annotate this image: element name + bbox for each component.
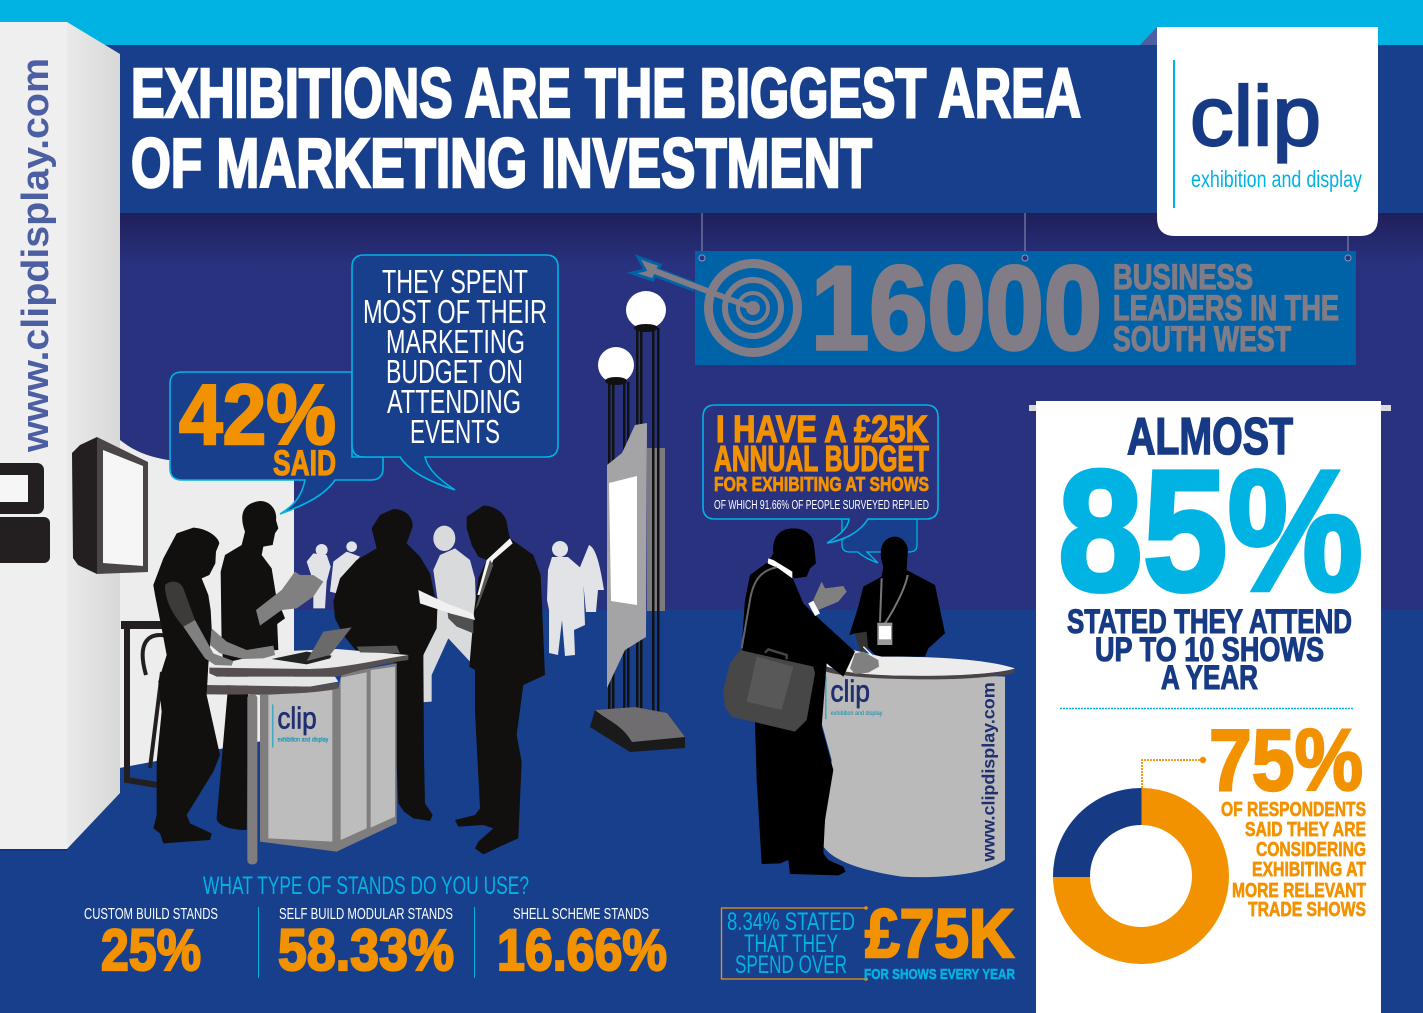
background visitors (307, 526, 476, 702)
callout: 8.34% stated 75K: SPEND OVER (735, 951, 847, 979)
person: woman at counter (153, 528, 275, 843)
75% stat with caption: SAID THEY ARE (1245, 818, 1366, 841)
logo card: clip (1190, 69, 1321, 163)
counter website address: www.clipdisplay.com (978, 682, 998, 863)
speech bubble: 25K budget: ANNUAL BUDGET (714, 438, 929, 479)
speech bubble: 25K budget: I HAVE A £25K (716, 409, 928, 451)
speech bubble: spent most of budget: THEY SPENT (382, 263, 528, 300)
stand type: shell scheme (474, 906, 667, 983)
white hanging banner: 85% attend (1029, 401, 1391, 1013)
icon: wall monitor left (0, 463, 50, 563)
icon: target with arrow (632, 257, 798, 352)
round reception counter with logo: clip (830, 675, 870, 709)
donut chart 75% (1053, 757, 1229, 964)
75% stat with caption: EXHIBITING AT (1252, 858, 1366, 881)
stand type: self build modular: SELF BUILD MODULAR STANDS (279, 906, 453, 923)
75% stat with caption (1209, 712, 1366, 921)
stand type: self build modular (258, 906, 454, 983)
speech bubble: spent most of budget (352, 255, 558, 490)
logo card: exhibition and display (1191, 166, 1362, 192)
stat caption (1113, 258, 1339, 359)
stand type: shell scheme: SHELL SCHEME STANDS (513, 906, 649, 923)
75% stat with caption: TRADE SHOWS (1248, 898, 1366, 921)
person: man in suit with paper (418, 506, 545, 854)
white hanging banner: 85% attend: 85% (1058, 435, 1363, 627)
speech bubble: 42% said: 42% (179, 368, 336, 463)
white hanging banner: 85% attend: A YEAR (1161, 659, 1258, 697)
stand type: self build modular: 58.33% (278, 918, 454, 983)
stand type: shell scheme: 16.66% (497, 918, 667, 983)
stat caption: BUSINESS (1113, 258, 1253, 297)
stat caption: LEADERS IN THE (1113, 289, 1339, 328)
callout: 8.34% stated 75K: THAT THEY (744, 930, 838, 958)
person: man with glasses (333, 509, 437, 821)
speech bubble: spent most of budget: EVENTS (410, 413, 500, 450)
speech bubble: 25K budget: FOR EXHIBITING AT SHOWS (714, 474, 929, 496)
person: man gesturing (217, 501, 323, 830)
75% stat with caption: CONSIDERING (1256, 838, 1366, 861)
callout: 8.34% stated 75K: £75K (865, 895, 1014, 972)
background visitors right (547, 541, 604, 656)
person: receptionist with lanyard (849, 537, 945, 657)
speech bubble: spent most of budget: MOST OF THEIR (363, 293, 547, 330)
speech bubble: spent most of budget: MARKETING (386, 323, 525, 360)
person: businessman with briefcase (723, 528, 879, 875)
booth wall and side panel (0, 22, 294, 850)
icon: wall monitor (72, 437, 148, 574)
lamp tower display (590, 291, 685, 752)
speech bubble: spent most of budget: ATTENDING (387, 383, 521, 420)
round reception counter with logo (817, 647, 1015, 877)
75% stat with caption: MORE RELEVANT (1232, 879, 1366, 902)
exhibition counter with logo: clip (277, 701, 317, 735)
speech bubble: 25K budget: OF WHICH 91.66% OF PEOPLE SURVEYED REPLIED (714, 497, 929, 512)
icon: laptop (272, 627, 352, 664)
exhibition counter with logo: exhibition and display (278, 737, 329, 744)
background: floor (0, 610, 1423, 1013)
stool and high shelf (121, 625, 168, 785)
exhibition counter with logo (207, 627, 408, 864)
speech bubble: 25K budget (703, 405, 938, 543)
round reception counter with logo: exhibition and display (831, 711, 882, 717)
callout: 8.34% stated 75K: 8.34% STATED (727, 908, 855, 936)
stat number: 16000 (811, 242, 1102, 375)
small reply speech bubble (842, 519, 917, 563)
stand type: custom build: CUSTOM BUILD STANDS (84, 906, 218, 923)
white hanging banner: 85% attend: ALMOST (1127, 408, 1293, 466)
speech bubble: 42% said: SAID (273, 444, 336, 483)
logo card (1140, 27, 1378, 236)
speech bubble: 42% said (170, 368, 383, 514)
stands survey heading: WHAT TYPE OF STANDS DO YOU USE? (203, 872, 529, 900)
white hanging banner: 85% attend: UP TO 10 SHOWS (1095, 631, 1324, 669)
background: exhibition hall wall (0, 213, 1423, 610)
75% stat with caption: 75% (1209, 712, 1363, 809)
stand type: custom build: 25% (101, 918, 201, 983)
title (131, 54, 1081, 202)
callout: 8.34% stated 75K: FOR SHOWS EVERY YEAR (864, 966, 1015, 983)
speech bubble: spent most of budget: BUDGET ON (386, 353, 523, 390)
vertical website address: www.clipdisplay.com (15, 58, 57, 453)
hanging banner: 16000 business leaders (695, 242, 1356, 375)
title: EXHIBITIONS ARE THE BIGGEST AREA (131, 54, 1081, 132)
background: header band (0, 45, 1423, 213)
75% stat with caption: OF RESPONDENTS (1221, 798, 1366, 821)
background: top cyan band (0, 0, 1423, 45)
callout: 8.34% stated 75K (722, 895, 1015, 983)
icon: shoulder briefcase (723, 567, 815, 732)
title: OF MARKETING INVESTMENT (131, 124, 872, 202)
hanging wires (702, 213, 1348, 256)
stat caption: SOUTH WEST (1113, 320, 1291, 359)
